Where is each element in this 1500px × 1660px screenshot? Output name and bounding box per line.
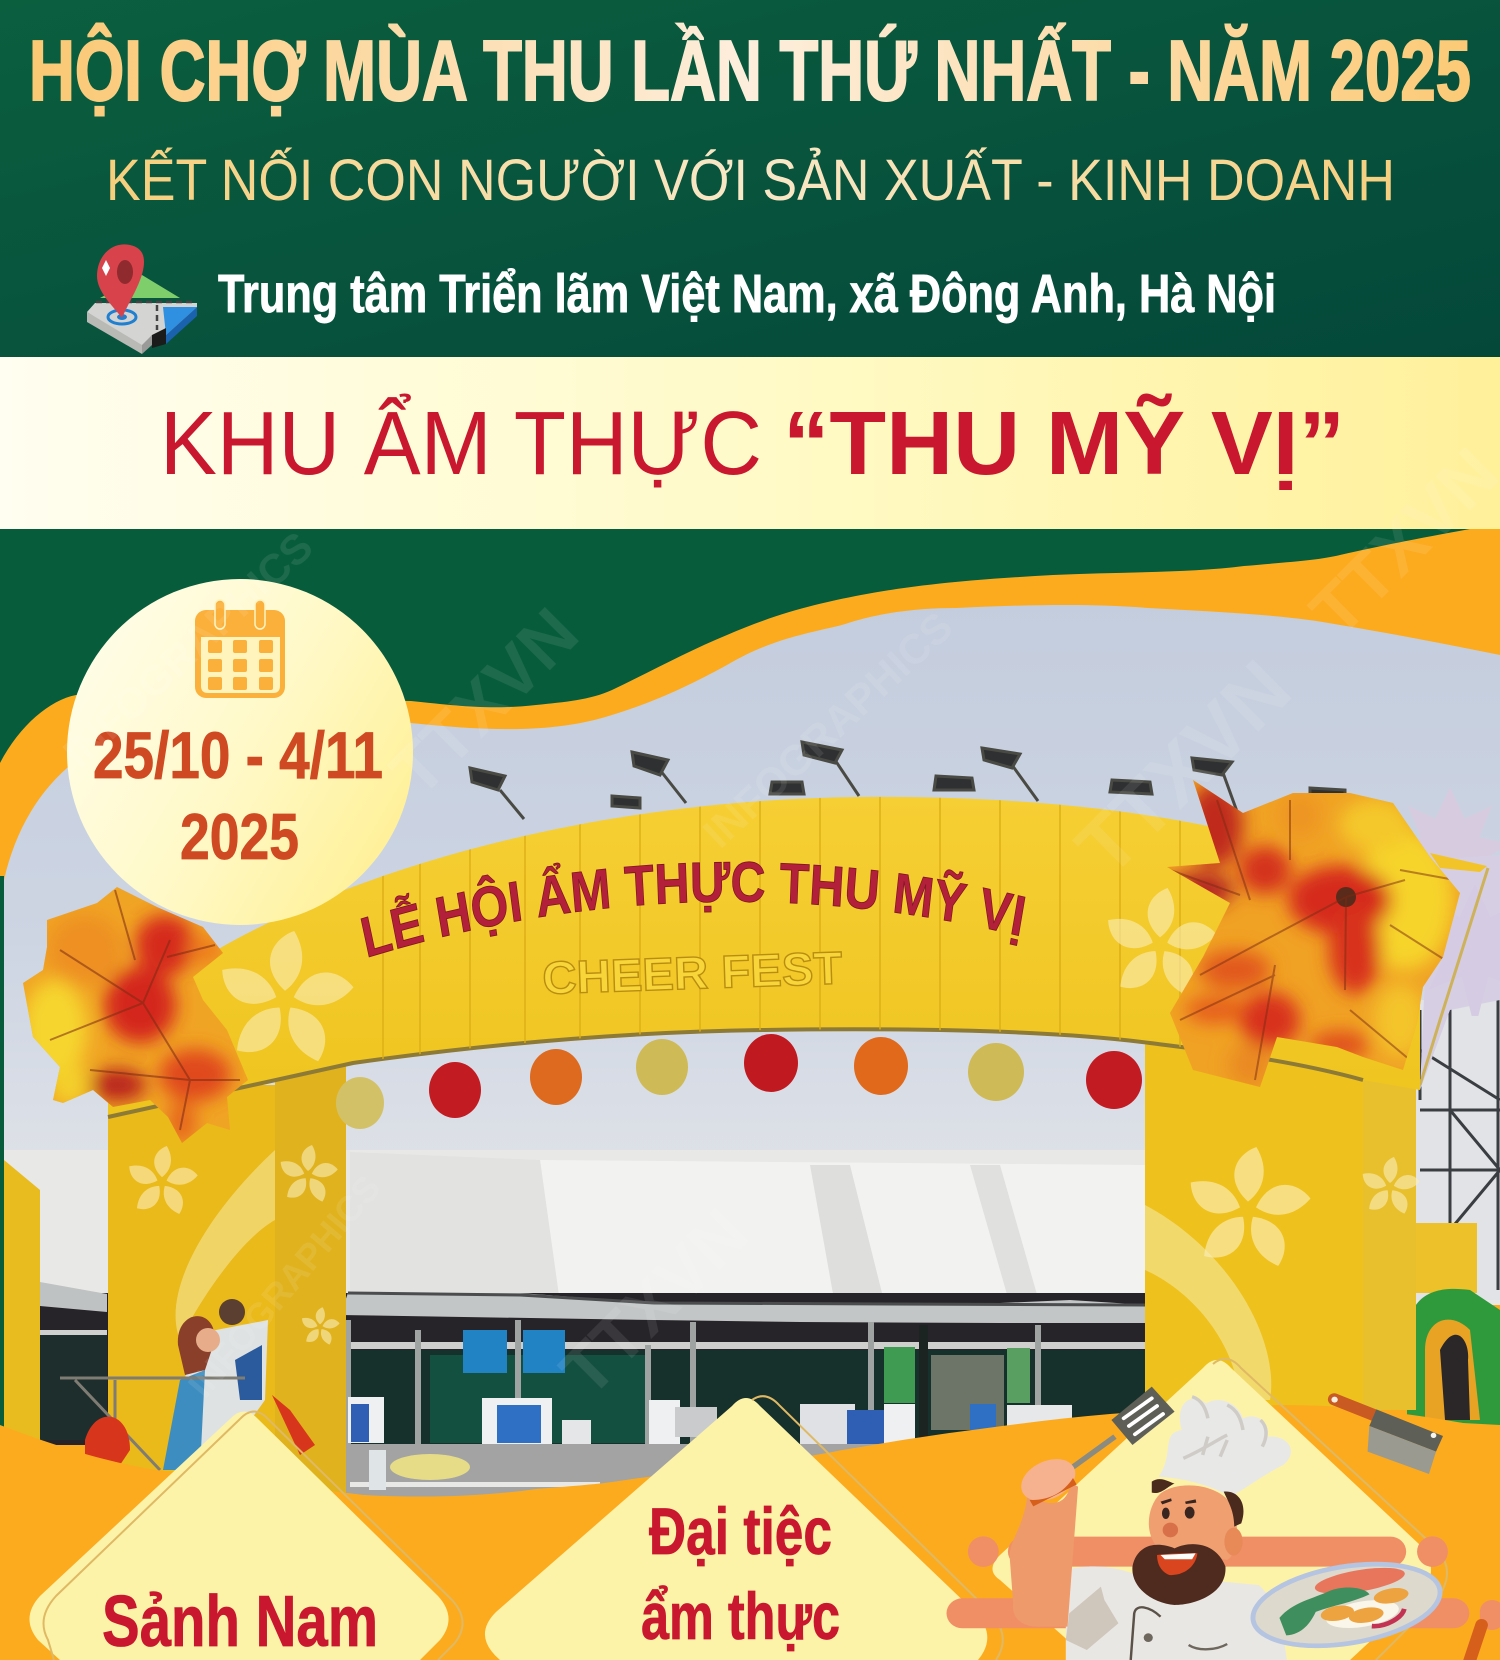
- chef head: [1149, 1485, 1237, 1560]
- label line 1: Đại tiệc: [649, 1494, 832, 1568]
- panel: green lower background: [0, 529, 1500, 1660]
- orange wave top: [0, 529, 1500, 1660]
- watermarks: INFOGRAPHICS: [694, 603, 962, 857]
- chef ear: [1224, 1528, 1243, 1556]
- spatula: [1071, 1387, 1175, 1468]
- date range: 25/10 - 4/11: [93, 718, 383, 792]
- jacket buttons: [1131, 1607, 1227, 1660]
- panel: date circle: [67, 579, 413, 925]
- lanterns: [336, 1034, 1142, 1129]
- stalls row: [40, 1282, 1150, 1445]
- watermarks: INFOGRAPHICS: [180, 1167, 389, 1405]
- banner heading: “THU MỸ VỊ”: [783, 393, 1345, 494]
- lilac decoration far right: [1408, 788, 1500, 1090]
- spotlights: [470, 742, 1345, 819]
- plate: [1246, 1552, 1447, 1658]
- chef arm: [1010, 1483, 1078, 1627]
- icon: map location pin: [87, 244, 197, 354]
- eyes and brows: [1161, 1498, 1196, 1519]
- location text: Trung tâm Triển lãm Việt Nam, xã Đông Anh, Hà Nội: [218, 264, 1276, 324]
- arch: [108, 797, 1420, 1117]
- label: Sảnh Nam: [102, 1582, 378, 1660]
- right pillar: [1145, 1030, 1421, 1410]
- green left edge strip: [0, 876, 4, 1431]
- maple leaves left cluster: [20, 880, 255, 1145]
- salami: [1313, 1563, 1407, 1599]
- cutout figures on left pillar: [60, 1299, 315, 1470]
- second hand shadow: [1066, 1587, 1118, 1650]
- photo: festival gate: [4, 605, 1500, 1496]
- panel: header background: [0, 0, 1500, 358]
- chef hand: [1014, 1451, 1083, 1509]
- panel: Đại tiệc ẩm thực diamond: [485, 1396, 1003, 1660]
- mouth: [1157, 1553, 1197, 1575]
- greens: [1276, 1583, 1374, 1636]
- cheer fest text: CHEER FEST: [542, 942, 843, 1004]
- photo sky: [4, 605, 1500, 1150]
- eggs: [1324, 1596, 1401, 1633]
- garnish: [1370, 1609, 1407, 1627]
- icon: calendar: [195, 600, 285, 698]
- yellow bags on ground: [369, 1450, 470, 1490]
- chef body: [1066, 1566, 1287, 1660]
- left pillar: [108, 1060, 346, 1500]
- maple leaves right cluster: [1160, 775, 1465, 1095]
- watermarks: TTXVN: [545, 1193, 763, 1411]
- background tent: [0, 1150, 1500, 1305]
- arch panels: [382, 796, 1181, 1059]
- left side post: [4, 1160, 40, 1440]
- panel: chef diamond: [992, 1359, 1447, 1660]
- subtitle: KẾT NỐI CON NGƯỜI VỚI SẢN XUẤT - KINH DOANH: [106, 148, 1395, 213]
- coolers: [348, 1397, 1072, 1444]
- panel: Sảnh Nam diamond: [29, 1412, 463, 1660]
- orange wave bottom: [0, 1405, 1500, 1660]
- year: 2025: [180, 800, 299, 873]
- sign text: LỄ HỘI ẨM THỰC THU MỸ VỊ: [360, 861, 1026, 958]
- nose: [1163, 1523, 1178, 1537]
- hair: [1152, 1479, 1243, 1527]
- watermarks: TTXVN: [1059, 644, 1307, 892]
- arch underside: [108, 1029, 1363, 1117]
- chef hat: [1159, 1397, 1291, 1497]
- watermarks: INFOGRAPHICS: [54, 523, 322, 777]
- banner heading: KHU ẨM THỰC: [160, 392, 762, 494]
- rolling pins: [946, 1536, 1500, 1630]
- ground: [346, 1444, 878, 1496]
- watermarks: TTXVN: [375, 593, 593, 811]
- chef illustration: [946, 1387, 1500, 1660]
- arch flower right: [1108, 888, 1215, 993]
- label line 2: ẩm thực: [641, 1579, 840, 1653]
- cleaver: [1331, 1397, 1443, 1474]
- arch flower left: [215, 931, 356, 1066]
- panel: banner band: [0, 357, 1500, 529]
- right pillar side structure: [1407, 1000, 1500, 1425]
- beard: [1132, 1544, 1226, 1605]
- watermarks: [54, 433, 1500, 1411]
- rolling pin handle: [1469, 1625, 1482, 1660]
